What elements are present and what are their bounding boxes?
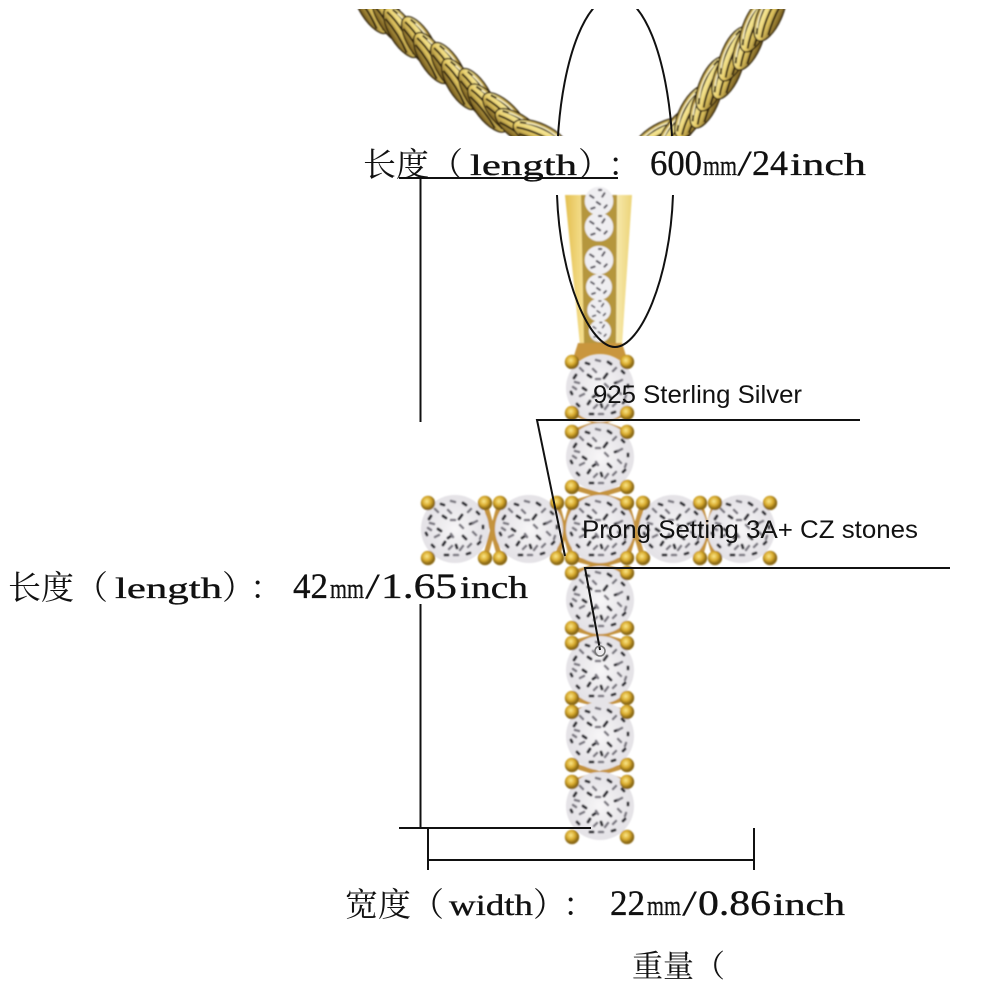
- label: pendant length: length: [115, 572, 222, 605]
- label: width: inch: [773, 886, 845, 922]
- label: pendant length: ：: [250, 571, 283, 607]
- rope chain: [356, 9, 786, 136]
- right rope strand: [638, 9, 786, 136]
- vertical stones: [566, 354, 634, 422]
- label: width: ）: [533, 888, 566, 924]
- measure lines: chain length: [399, 178, 618, 422]
- label: pendant length: 1.65: [381, 566, 457, 606]
- label: width: 宽度: [345, 887, 411, 924]
- label: width: [345, 883, 845, 924]
- cross pendant: [421, 354, 777, 844]
- leader end marker: [595, 646, 605, 656]
- label: chain length: ：: [608, 148, 641, 184]
- prongs: [421, 355, 777, 844]
- label: chain length: mm: [703, 151, 737, 182]
- label: pendant length: mm: [330, 574, 364, 605]
- label: width: width: [449, 889, 533, 922]
- label: pendant length: （: [75, 571, 108, 607]
- left rope strand: [356, 9, 564, 136]
- label: pendant length: inch: [460, 569, 528, 605]
- label: pendant length: 42: [293, 566, 328, 606]
- label: width: 0.86: [698, 883, 771, 923]
- annotation ellipse around bail: [557, 0, 673, 347]
- label: chain length: [363, 143, 866, 184]
- label: pendant length: [8, 566, 528, 607]
- label: prong setting stones: Prong Setting 3A+ CZ stones: [582, 516, 918, 544]
- label: width: /: [682, 883, 697, 923]
- horizontal stones: [421, 495, 489, 563]
- label: chain length: /: [737, 143, 752, 183]
- width bracket: [428, 828, 754, 870]
- label: width: （: [411, 888, 444, 924]
- label: chain length: ）: [578, 148, 611, 184]
- label: width: ：: [563, 888, 596, 924]
- label: 925 sterling silver: 925 Sterling Silver: [593, 381, 802, 409]
- label: weight (cut off): 重量（: [632, 949, 725, 984]
- label: width: mm: [647, 891, 681, 922]
- label: pendant length: ）: [222, 571, 255, 607]
- label: pendant length: /: [365, 566, 380, 606]
- label: chain length: length: [470, 149, 577, 182]
- label: pendant length: 长度: [8, 570, 74, 607]
- leader line: 925 sterling silver: [537, 420, 860, 556]
- label: chain length: 长度: [363, 147, 429, 184]
- label: chain length: 24: [752, 143, 788, 183]
- label: width: 22: [610, 883, 645, 923]
- leader line: prong setting: [585, 568, 950, 650]
- label: chain length: 600: [650, 143, 702, 183]
- bail with stones: [565, 187, 632, 362]
- label: chain length: inch: [790, 146, 866, 182]
- gold connectors: [485, 413, 715, 782]
- label: chain length: （: [430, 148, 463, 184]
- measure lines: pendant length: [399, 604, 591, 828]
